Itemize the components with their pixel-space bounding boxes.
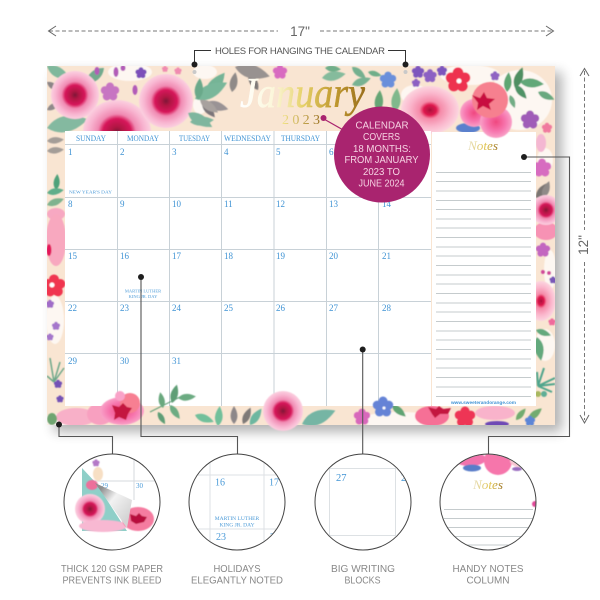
caption: holidays <box>191 563 283 586</box>
day numbers: 3 <box>172 147 177 157</box>
caption: holidays: HOLIDAYS <box>214 563 260 575</box>
notes heading zoom: Notes <box>472 477 503 492</box>
day numbers: 19 <box>276 251 286 261</box>
day numbers: 30 <box>120 356 130 366</box>
detail circle: paper: 30 <box>136 482 144 490</box>
website: www.sweeterandorange.com <box>450 400 516 405</box>
left leaves <box>47 66 66 78</box>
callout: 18 months: 18 MONTHS: <box>353 144 411 155</box>
detail circle: holidays <box>189 450 285 555</box>
callout: holes for hanging: HOLES FOR HANGING THE CALENDAR <box>215 46 385 57</box>
day numbers: 26 <box>276 303 286 313</box>
caption: writing blocks: BIG WRITING <box>331 563 395 575</box>
floral border background <box>40 60 561 430</box>
bottom border flowers <box>56 408 92 425</box>
caption: writing blocks <box>331 563 395 586</box>
caption: notes: HANDY NOTES <box>452 563 524 575</box>
day numbers: 11 <box>224 199 233 209</box>
weekday header: WEDNESDAY <box>224 134 271 143</box>
purple flowers <box>101 83 119 100</box>
caption: paper: THICK 120 GSM PAPER <box>61 563 163 575</box>
sheet shadow <box>54 72 562 432</box>
callout: 18 months: 2023 TO <box>363 167 400 178</box>
detail circle: paper: 29 <box>101 482 108 490</box>
callout: holes for hanging <box>192 46 408 74</box>
day numbers: 29 <box>68 356 78 366</box>
day numbers: 14 <box>382 199 392 209</box>
detail circle: writing block <box>315 454 412 550</box>
day numbers: 20 <box>329 251 338 261</box>
detail circle: holidays: 23 <box>216 532 226 543</box>
day numbers: 22 <box>68 303 77 313</box>
day numbers: 5 <box>276 147 281 157</box>
day numbers: 9 <box>120 199 125 209</box>
callout: 18 months: CALENDAR <box>356 120 408 132</box>
day numbers: 17 <box>172 251 182 261</box>
purple cluster <box>412 66 424 78</box>
day numbers: 24 <box>172 303 182 313</box>
weekday header <box>76 134 320 143</box>
caption: paper: PREVENTS INK BLEED <box>62 574 162 586</box>
day numbers: 27 <box>329 303 338 313</box>
red flower <box>446 67 470 91</box>
day numbers: 23 <box>120 303 130 313</box>
day numbers: 6 <box>329 147 334 157</box>
leader: holidays <box>138 274 238 454</box>
caption: writing blocks: BLOCKS <box>344 574 380 586</box>
caption: notes <box>452 563 524 586</box>
calendar sheet <box>40 60 561 431</box>
day numbers: 10 <box>172 199 182 209</box>
detail circle: notes <box>440 447 538 550</box>
caption: holidays: ELEGANTLY NOTED <box>191 574 283 586</box>
dimension: height 12 inches: 12" <box>576 235 591 255</box>
caption: paper <box>61 563 163 586</box>
callout: 18 months: JUNE 2024 <box>358 178 405 190</box>
weekday header: TUESDAY <box>179 134 210 143</box>
big pink rose right <box>401 86 459 134</box>
leader: paper <box>56 422 112 454</box>
rose 1 <box>51 71 99 119</box>
day numbers: 31 <box>172 356 181 366</box>
right leaves <box>208 72 226 86</box>
day numbers: 28 <box>382 303 392 313</box>
holiday: mlk: KING JR. DAY <box>129 294 158 299</box>
flowers overlapping grid <box>100 82 512 431</box>
day numbers: 13 <box>329 199 338 209</box>
detail circle: writing block: 27 <box>336 473 346 484</box>
detail circle: holidays: 24 <box>270 532 280 543</box>
blue under flower <box>456 123 480 133</box>
detail circle: writing block: 28 <box>401 473 412 484</box>
calendar grid <box>65 131 431 406</box>
rose 2 <box>83 100 151 131</box>
top right leaves <box>325 65 341 72</box>
weekday header: MONDAY <box>127 134 159 143</box>
day numbers: 12 <box>276 199 285 209</box>
detail circle: holidays: KING JR. DAY <box>219 522 255 528</box>
callout: 18 months: FROM JANUARY <box>344 155 419 166</box>
left column <box>47 136 64 144</box>
rose 3 <box>139 74 193 128</box>
january title: January <box>240 71 365 117</box>
holiday: mlk: MARTIN LUTHER <box>125 288 161 294</box>
weekday header: SUNDAY <box>76 134 106 143</box>
holiday: mlk <box>125 288 161 299</box>
big pink peony <box>460 99 488 127</box>
detail circle: holidays: 17 <box>269 478 279 488</box>
caption: notes: COLUMN <box>466 574 510 586</box>
right column <box>536 134 546 152</box>
detail circle: holidays: MARTIN LUTHER <box>215 516 260 522</box>
detail circle: paper <box>64 450 165 550</box>
day numbers <box>68 147 392 366</box>
day numbers: 15 <box>68 251 78 261</box>
callout: 18 months <box>320 106 430 202</box>
white splashes <box>40 63 556 428</box>
day numbers: 21 <box>382 251 391 261</box>
day numbers: 4 <box>224 147 229 157</box>
notes heading: Notes <box>467 138 498 153</box>
leader: notes <box>488 154 570 454</box>
day numbers: 2 <box>120 147 124 157</box>
holiday: new year: NEW YEAR'S DAY <box>69 190 113 194</box>
year: 2023 <box>282 113 320 128</box>
dimension: height 12 inches <box>576 68 591 423</box>
dimension: width 17 inches: 17" <box>290 24 310 39</box>
day numbers: 18 <box>224 251 234 261</box>
leader: writing blocks <box>360 346 366 454</box>
callout: 18 months: COVERS <box>363 132 400 143</box>
weekday header: THURSDAY <box>281 134 320 143</box>
day numbers: 1 <box>68 147 72 157</box>
day numbers: 25 <box>224 303 234 313</box>
notes column <box>432 132 536 406</box>
detail circle: holidays: 16 <box>215 478 225 488</box>
day numbers: 8 <box>68 199 73 209</box>
day numbers: 16 <box>120 251 130 261</box>
dimension: width 17 inches <box>48 24 554 39</box>
